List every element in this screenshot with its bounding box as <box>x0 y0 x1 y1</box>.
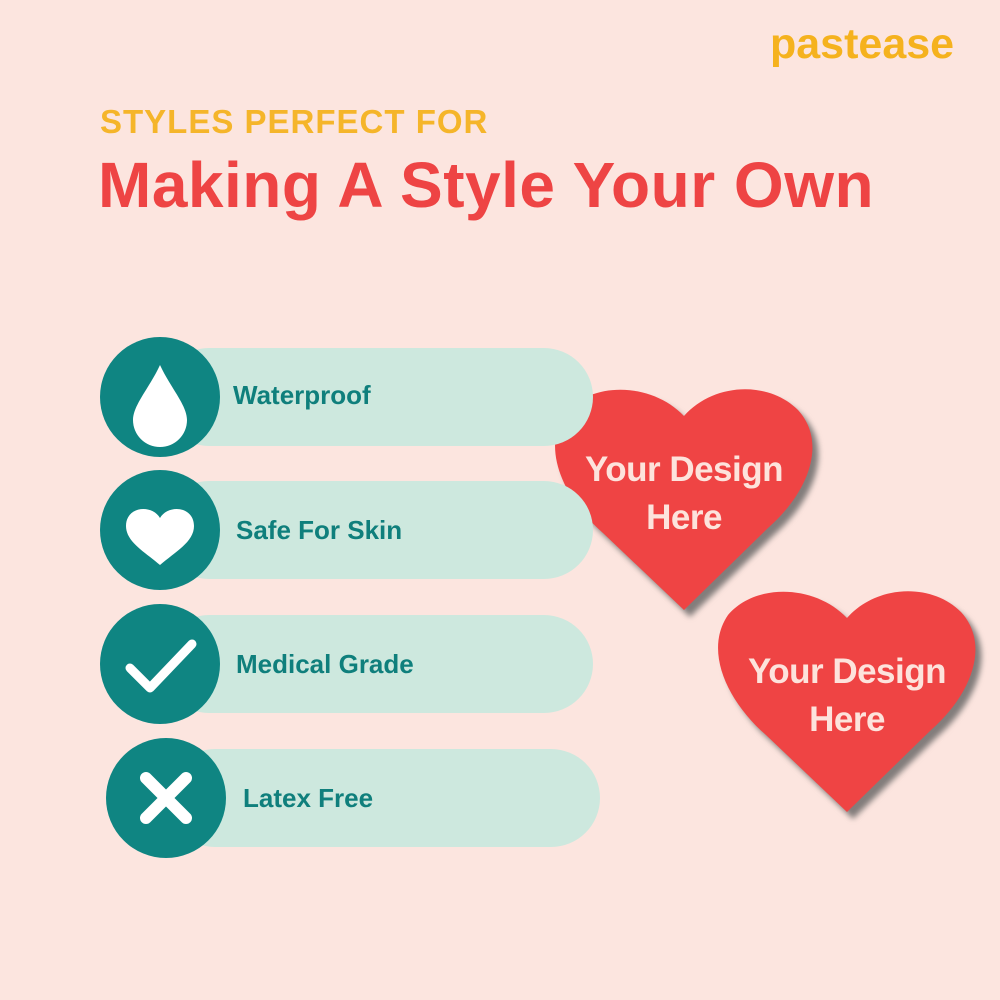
feature: safe for skin: Safe For Skin <box>236 515 402 545</box>
subtitle: STYLES PERFECT FOR <box>100 103 488 140</box>
icon: check <box>100 604 220 724</box>
icon: x <box>106 738 226 858</box>
heart 2 <box>718 591 986 822</box>
feature: medical grade: Medical Grade <box>236 649 414 679</box>
feature: medical grade <box>100 604 593 724</box>
heart 1: Your Design <box>585 450 783 489</box>
logo: pastease <box>770 20 954 68</box>
heart 1: Here <box>646 498 722 537</box>
feature: waterproof <box>100 337 593 457</box>
icon: drop <box>100 337 220 457</box>
feature: waterproof: Waterproof <box>233 380 371 410</box>
title: Making A Style Your Own <box>98 149 874 221</box>
feature: safe for skin <box>100 470 593 590</box>
feature: latex free: Latex Free <box>243 783 373 813</box>
heart 2: Here <box>809 700 885 739</box>
icon: heart <box>100 470 220 590</box>
feature: latex free <box>106 738 600 858</box>
heart 1 <box>555 389 822 620</box>
heart 2: Your Design <box>748 652 946 691</box>
